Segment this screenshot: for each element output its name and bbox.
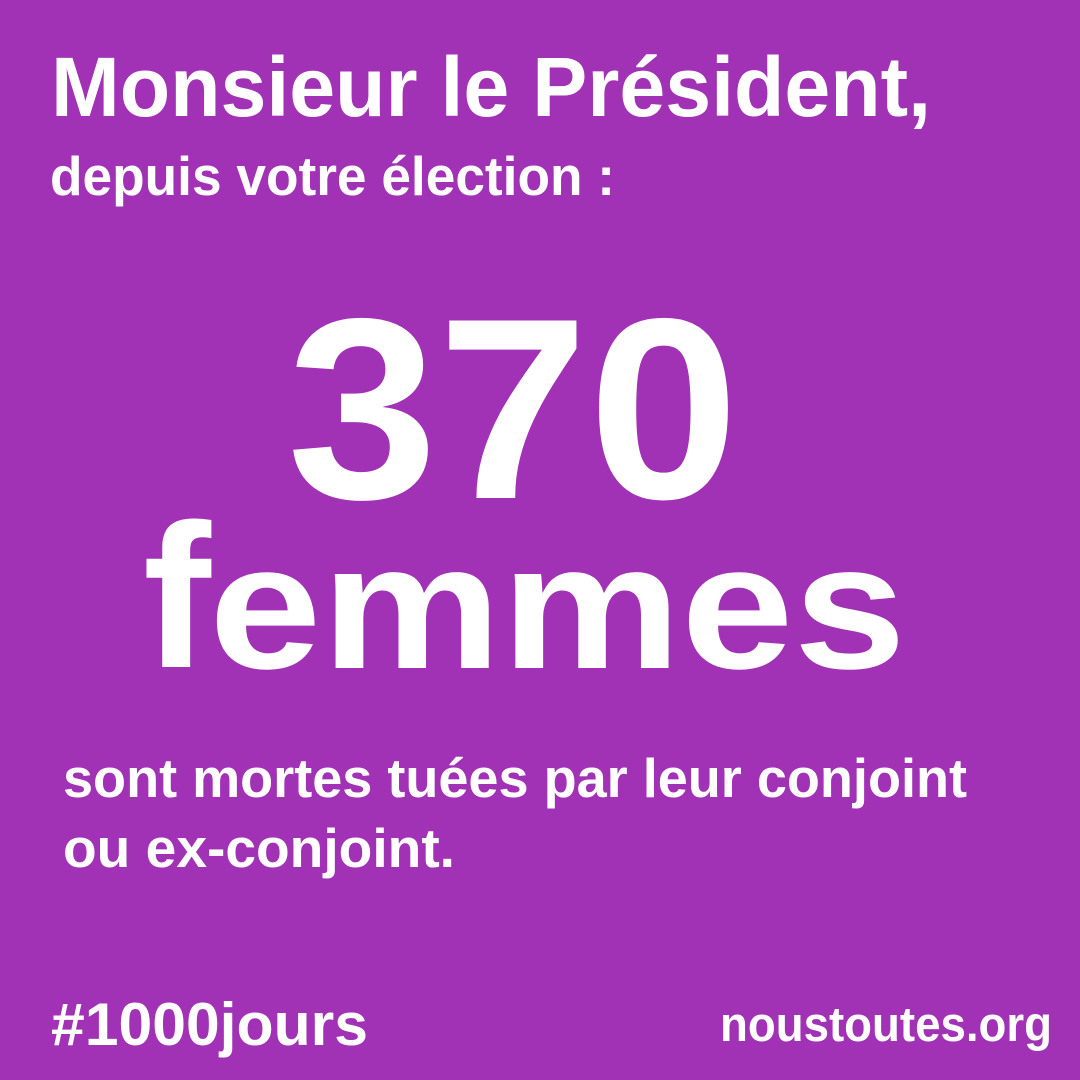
description text: ou ex-conjoint. bbox=[63, 817, 455, 879]
website: noustoutes.org bbox=[720, 998, 1052, 1052]
description text: sont mortes tuées par leur conjoint bbox=[63, 747, 967, 809]
hashtag: #1000jours bbox=[51, 991, 368, 1058]
title: Monsieur le Président, bbox=[51, 40, 931, 134]
big word: f bbox=[143, 482, 212, 711]
big number: 370 bbox=[287, 264, 739, 553]
big word bbox=[143, 482, 906, 711]
description text bbox=[63, 747, 967, 879]
subtitle: depuis votre élection : bbox=[50, 145, 615, 207]
big word: emmes bbox=[209, 507, 906, 706]
